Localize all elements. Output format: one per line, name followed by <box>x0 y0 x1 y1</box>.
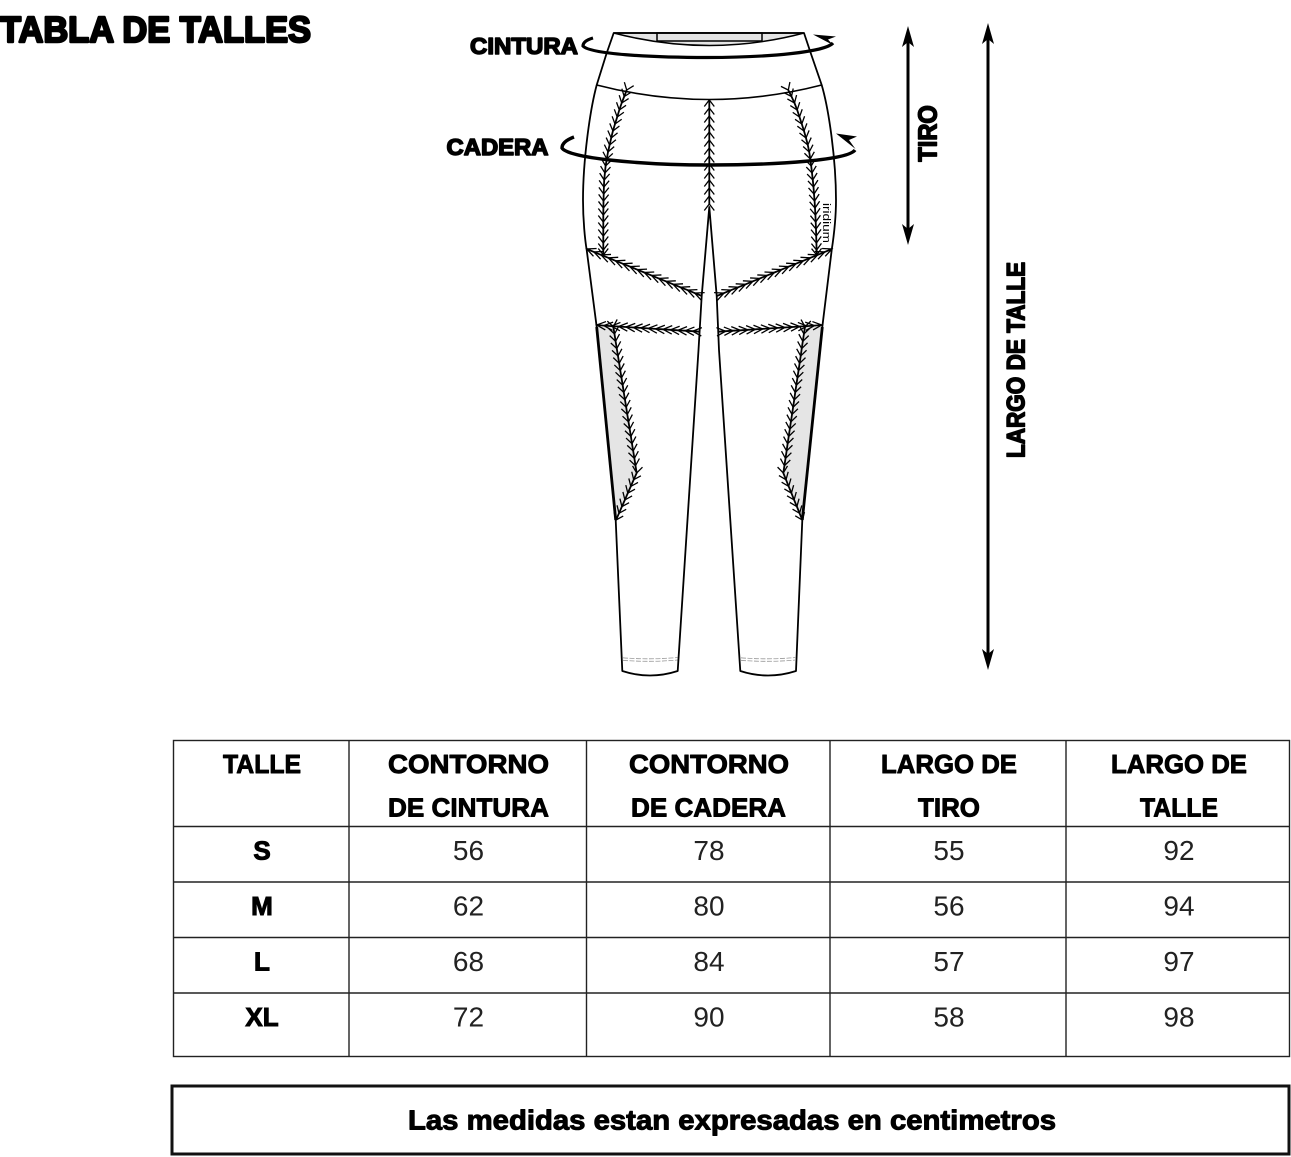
row XL: XL <box>245 1002 279 1032</box>
left knee seam <box>597 325 700 332</box>
table header <box>223 749 1247 822</box>
row M: M <box>251 891 273 921</box>
full length label: LARGO DE TALLE <box>1002 262 1030 458</box>
table header: TALLE <box>1140 792 1218 822</box>
table header: CONTORNO <box>629 749 789 779</box>
row M: 62 <box>453 890 484 922</box>
rise arrow <box>902 26 914 245</box>
right knee seam <box>718 325 822 332</box>
row L <box>254 946 1195 977</box>
units note <box>172 1086 1289 1154</box>
size table <box>174 740 1290 1056</box>
row XL: 58 <box>933 1002 965 1032</box>
units note: Las medidas estan expresadas en centimetros <box>408 1104 1056 1136</box>
row M: 56 <box>933 890 965 922</box>
waist label: CINTURA <box>470 33 578 59</box>
table header: DE CINTURA <box>388 792 549 822</box>
title: TABLA DE TALLES <box>0 9 311 50</box>
row L: L <box>254 946 270 976</box>
row M: 94 <box>1163 890 1195 922</box>
full length arrow <box>982 23 994 670</box>
table header: TALLE <box>223 749 301 779</box>
table grid <box>174 740 1290 1056</box>
table header: DE CADERA <box>631 792 786 822</box>
row L: 84 <box>693 946 725 977</box>
left lower seam <box>613 327 637 520</box>
right thigh seam <box>717 249 832 296</box>
left hip seam <box>603 90 627 255</box>
table header: LARGO DE <box>1111 749 1247 779</box>
row L: 57 <box>933 946 965 977</box>
table header: LARGO DE <box>881 749 1017 779</box>
rise label: TIRO <box>912 105 942 162</box>
row XL: 90 <box>693 1002 725 1032</box>
row M <box>251 890 1195 922</box>
waistband inner back <box>614 33 804 46</box>
right hip seam <box>788 90 817 255</box>
right lower seam <box>783 327 805 520</box>
center seam <box>708 100 710 204</box>
waist measure arrow <box>583 34 836 58</box>
row L: 68 <box>453 946 484 977</box>
hip measure arrow <box>562 134 857 165</box>
hem stitches <box>623 658 796 661</box>
thicker outer edge of mesh panels <box>597 327 822 520</box>
garment outline <box>583 33 836 676</box>
waistband seam <box>597 85 822 100</box>
row XL: 72 <box>453 1002 484 1032</box>
left thigh seam <box>587 249 702 296</box>
side mesh panels <box>597 327 822 520</box>
table header: CONTORNO <box>388 749 549 779</box>
row S: S <box>253 836 271 866</box>
leggings technical drawing <box>583 33 836 676</box>
hip label: CADERA <box>446 134 548 160</box>
row S: 56 <box>453 835 484 866</box>
row XL <box>245 1002 1195 1032</box>
brand mark: iridium <box>820 203 832 243</box>
row XL: 98 <box>1163 1002 1195 1032</box>
table header: TIRO <box>918 792 980 822</box>
row S <box>253 835 1195 866</box>
row L: 97 <box>1163 946 1195 977</box>
row M: 80 <box>693 890 725 922</box>
row S: 78 <box>693 835 725 866</box>
row S: 55 <box>933 835 965 866</box>
row S: 92 <box>1163 835 1195 866</box>
